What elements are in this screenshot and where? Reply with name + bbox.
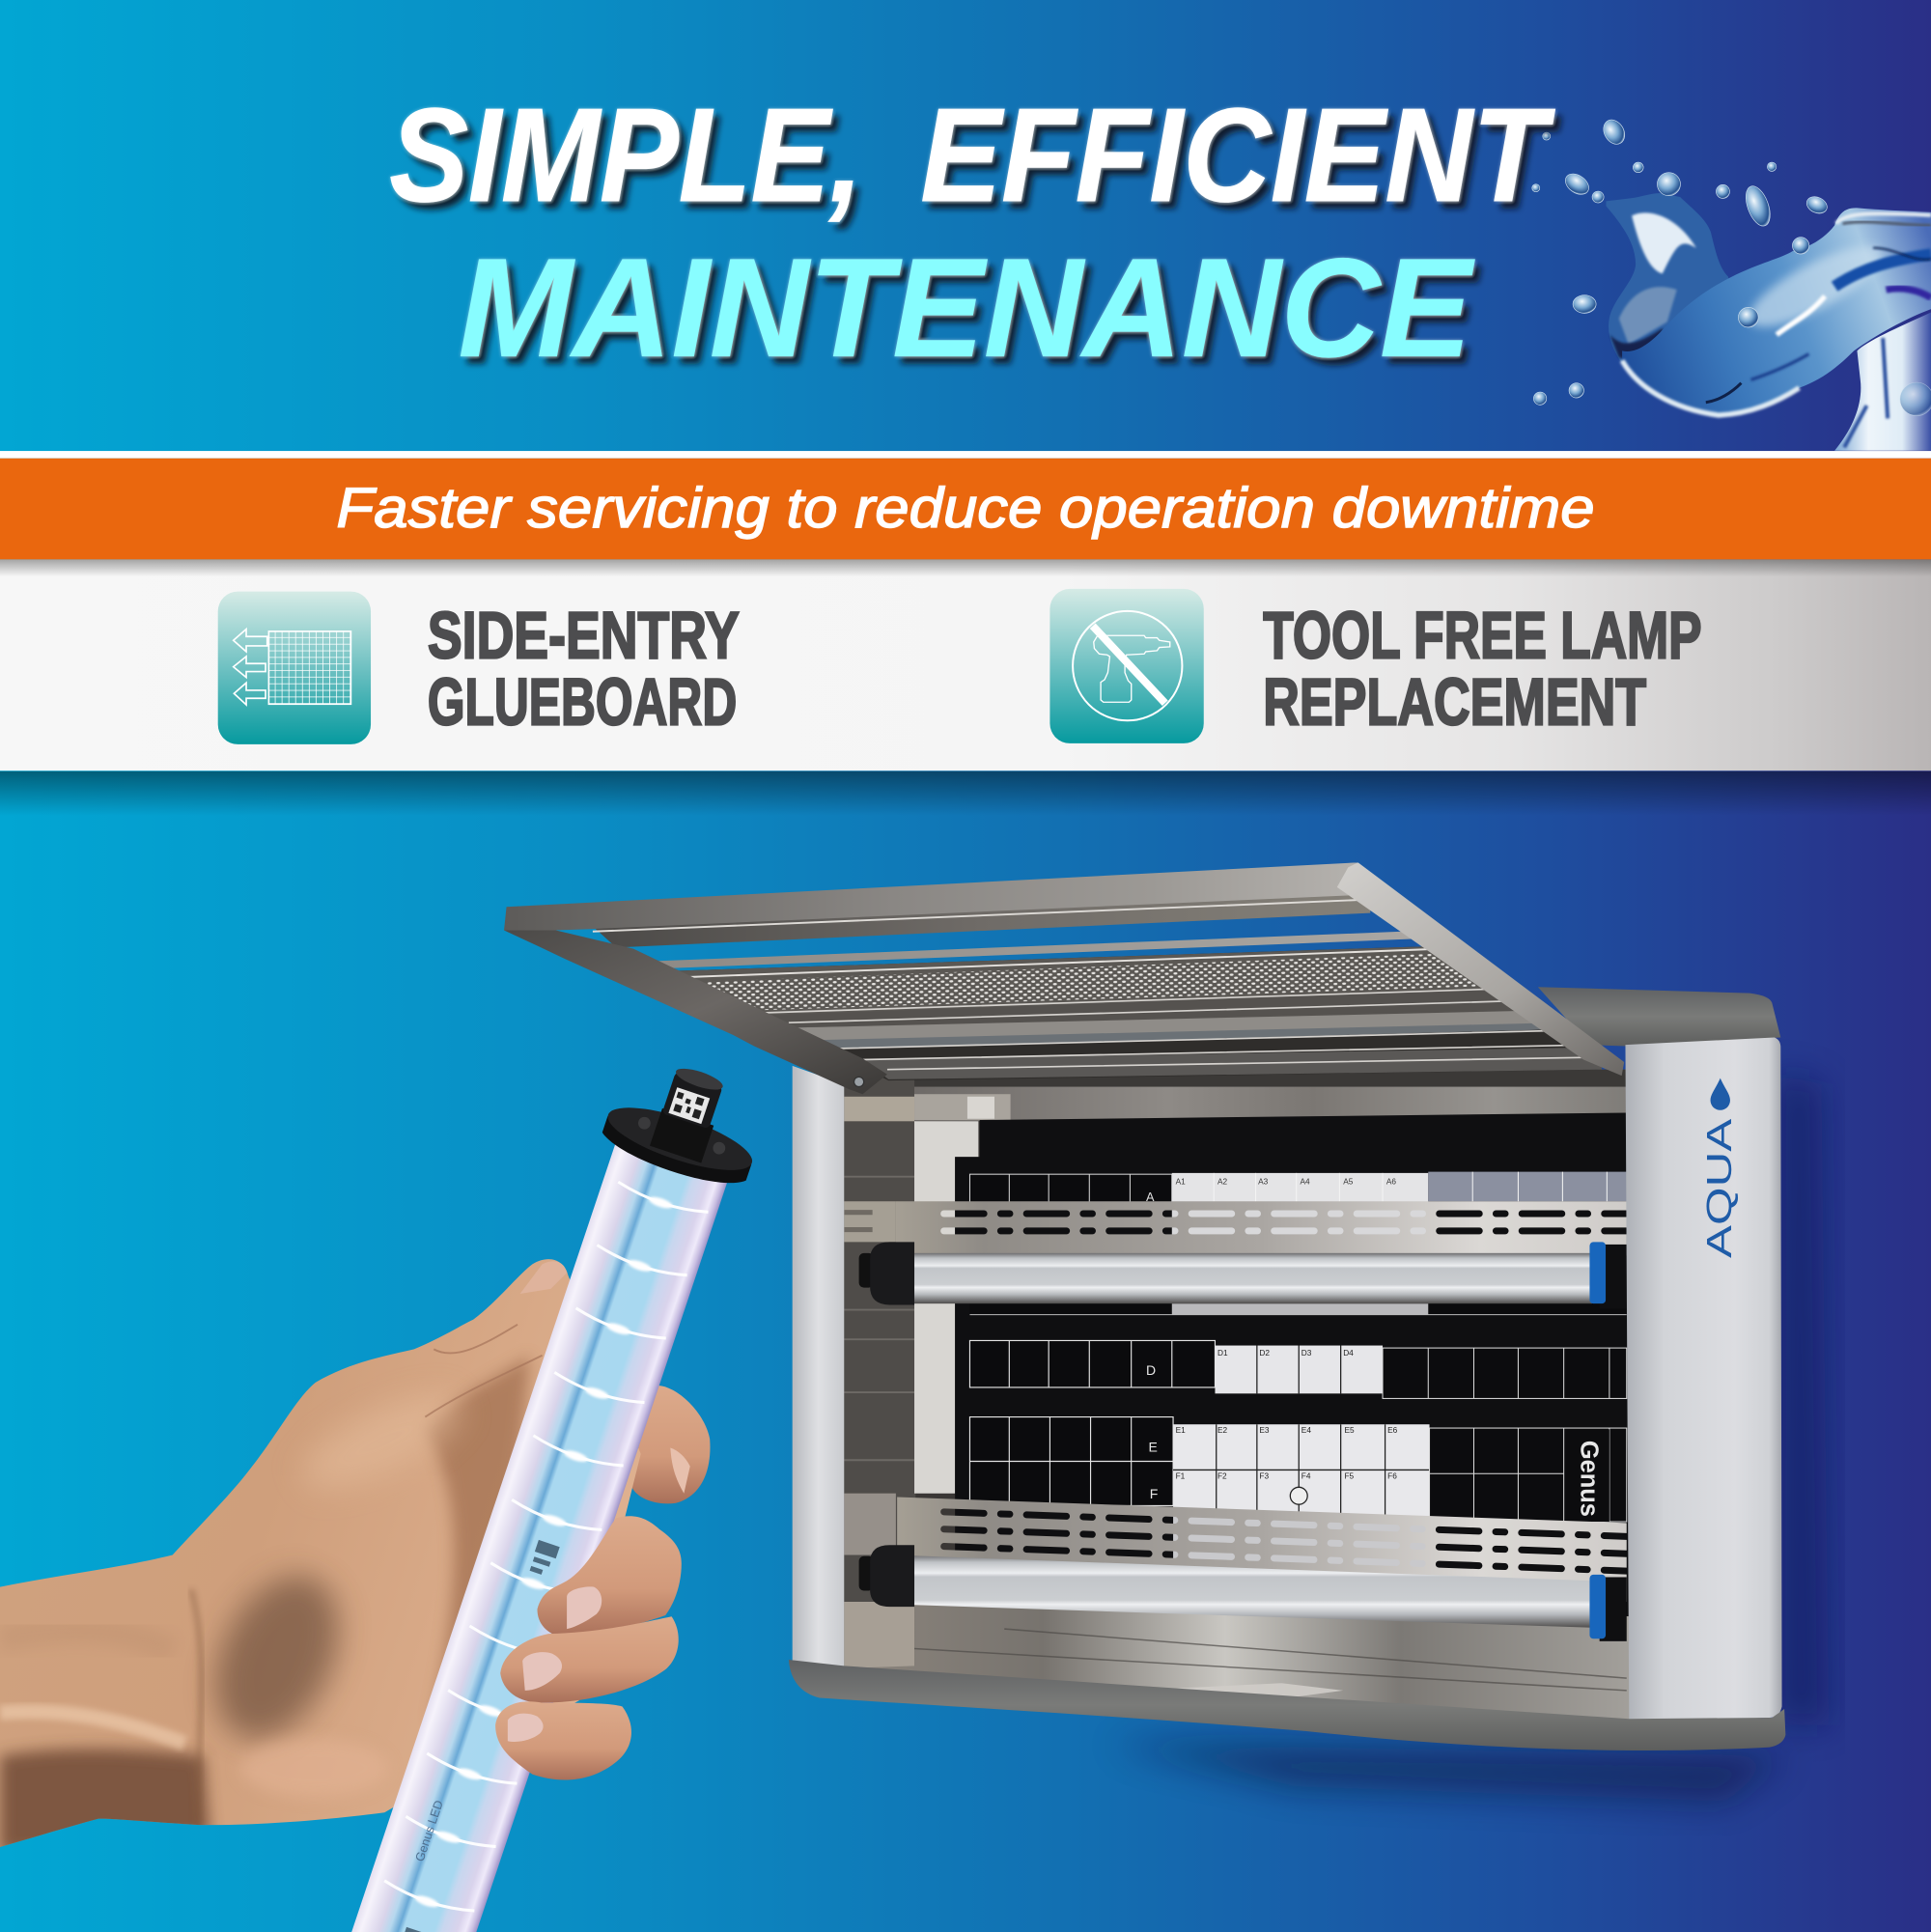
lid lower base bbox=[673, 946, 1602, 1080]
ribbon light centre bbox=[1748, 244, 1885, 332]
glueboard rows E and F: F6 bbox=[1387, 1470, 1397, 1480]
ribbon highlights bbox=[1777, 296, 1825, 335]
heading: tool free lamp replacement: TOOL FREE LAMP bbox=[1263, 598, 1702, 672]
glueboard rows E and F: F2 bbox=[1217, 1470, 1227, 1480]
glueboard row C bbox=[969, 1303, 1627, 1315]
glueboard rows E and F: E1 bbox=[1176, 1425, 1186, 1435]
glueboard rows E and F: E5 bbox=[1344, 1425, 1355, 1435]
glueboard row G behind plate bbox=[1173, 1517, 1430, 1596]
water lower leg bbox=[1834, 312, 1931, 451]
ring fingernail bbox=[522, 1652, 562, 1691]
upper perforated plate bbox=[896, 1201, 1627, 1255]
lid hinge screw bbox=[854, 1077, 864, 1087]
glueboard bbox=[955, 1112, 1639, 1620]
ring finger bbox=[500, 1616, 679, 1703]
logo: AQUA bbox=[1700, 1078, 1739, 1258]
glueboard rows E and F bbox=[969, 1417, 1627, 1522]
left interior wall bbox=[844, 1070, 915, 1673]
heading: tool free lamp replacement: REPLACEMENT bbox=[1263, 664, 1646, 739]
upper lamp bbox=[859, 1242, 1627, 1308]
title line 1: efficient: EFFICIENT bbox=[920, 81, 1555, 230]
top cap bbox=[1538, 987, 1780, 1046]
cabinet interior bbox=[838, 1070, 1639, 1727]
lid top frame bbox=[504, 862, 1368, 930]
title line 1: simple: SIMPLE, bbox=[389, 81, 862, 230]
heading: side-entry glueboard bbox=[428, 598, 740, 739]
little finger bbox=[495, 1701, 631, 1779]
glueboard row A: A4 bbox=[1301, 1176, 1310, 1186]
glueboard row A: A5 bbox=[1343, 1176, 1354, 1186]
title line 2: MAINTENANCE bbox=[459, 229, 1475, 386]
glueboard row D bbox=[969, 1340, 1627, 1398]
icon: side-entry glueboard bbox=[218, 592, 371, 744]
hand shading bbox=[0, 1325, 543, 1855]
glueboard row D: D bbox=[1146, 1362, 1156, 1378]
LED lamp bbox=[327, 1049, 774, 1932]
banner: orange subtitle bbox=[0, 459, 1931, 559]
hand: fingers in front of lamp bbox=[495, 1516, 682, 1779]
glueboard rows E and F: E3 bbox=[1259, 1425, 1270, 1435]
glueboard rows E and F: F bbox=[1150, 1486, 1158, 1501]
crown grey shade bbox=[1619, 287, 1677, 345]
index finger bbox=[630, 1386, 710, 1503]
little fingernail bbox=[508, 1714, 544, 1742]
glueboard row D: D4 bbox=[1343, 1348, 1354, 1358]
panel: features bbox=[0, 559, 1931, 816]
logo: AQUA: AQUA bbox=[1700, 1119, 1739, 1258]
glueboard rows E and F: E6 bbox=[1387, 1425, 1398, 1435]
lamp driver label bbox=[402, 1539, 560, 1932]
white divider band bbox=[0, 451, 1931, 459]
ribbon rim bbox=[1622, 360, 1799, 415]
thumbnail bbox=[520, 1261, 567, 1294]
top steel band bbox=[914, 1070, 1639, 1121]
floor plate bbox=[844, 1602, 1639, 1727]
panel shadow bbox=[0, 771, 1931, 816]
glueboard rows E and F: E bbox=[1149, 1439, 1158, 1454]
illustration: water splash bbox=[1532, 116, 1931, 451]
palm and arm bbox=[0, 1259, 641, 1847]
panel background bbox=[0, 559, 1931, 770]
glueboard rows E and F: F4 bbox=[1301, 1470, 1311, 1480]
lid lower strips bbox=[763, 988, 1602, 1079]
heading: tool free lamp replacement bbox=[1263, 598, 1702, 739]
lamp end cap bbox=[598, 1049, 774, 1194]
lamp brand text: Genus LED bbox=[412, 1799, 446, 1863]
Genus logo: Genus bbox=[1576, 1441, 1603, 1517]
glueboard rows E and F: F3 bbox=[1259, 1470, 1269, 1480]
icon: no tools bbox=[1049, 589, 1204, 743]
glueboard rows E and F: F1 bbox=[1176, 1470, 1186, 1480]
ribbon top edge bbox=[1836, 213, 1931, 224]
right pillar bbox=[1625, 1038, 1782, 1722]
water ribbon bbox=[1622, 208, 1931, 416]
glueboard rows E and F: E4 bbox=[1301, 1425, 1311, 1435]
title bbox=[389, 81, 1555, 386]
glueboard row B behind plate bbox=[1172, 1203, 1428, 1252]
water crown bbox=[1606, 193, 1731, 364]
glueboard rows E and F: E2 bbox=[1217, 1425, 1228, 1435]
middle finger bbox=[537, 1516, 682, 1638]
glueboard row D: D2 bbox=[1259, 1348, 1270, 1358]
hand: palm and index finger behind lamp bbox=[0, 1259, 710, 1855]
product: hinged lid bbox=[504, 862, 1624, 1094]
glueboard row A: A2 bbox=[1217, 1176, 1228, 1186]
water droplets bbox=[1532, 116, 1931, 416]
heading: side-entry glueboard: GLUEBOARD bbox=[428, 664, 737, 739]
crown highlight bbox=[1632, 212, 1696, 273]
LED glow points bbox=[414, 1194, 674, 1910]
glueboard row A: A3 bbox=[1258, 1176, 1269, 1186]
glueboard row A bbox=[969, 1172, 1627, 1204]
glueboard row A: A bbox=[1146, 1190, 1155, 1204]
left pillar bbox=[793, 1066, 844, 1670]
white column bbox=[914, 1121, 978, 1494]
lid strip 2 bbox=[590, 892, 1370, 947]
crown dark base bbox=[1609, 327, 1664, 359]
glueboard row D: D1 bbox=[1217, 1348, 1228, 1358]
lid left rail bbox=[504, 930, 887, 1094]
glueboard row A: A1 bbox=[1176, 1176, 1186, 1186]
lid right rail bbox=[1337, 862, 1624, 1076]
heading: side-entry glueboard: SIDE-ENTRY bbox=[428, 598, 740, 672]
banner: orange subtitle: Faster servicing to reduce operation downtime bbox=[336, 477, 1595, 540]
glueboard row A: A6 bbox=[1386, 1176, 1396, 1186]
lower lamp bbox=[859, 1545, 1627, 1641]
lid strip 3 bbox=[656, 932, 1414, 968]
lid perforated section bbox=[673, 946, 1513, 1018]
bottom tray bbox=[789, 1660, 1785, 1750]
product: UV fly trap cabinet bbox=[789, 987, 1785, 1750]
lamp tube body bbox=[343, 1140, 729, 1932]
LED bars bbox=[382, 1182, 708, 1917]
orange shadow bbox=[0, 559, 1931, 576]
lower perforated plate bbox=[897, 1498, 1627, 1602]
cabinet shadow bbox=[1109, 1072, 1829, 1802]
glueboard row D: D3 bbox=[1301, 1348, 1312, 1358]
middle fingernail bbox=[567, 1586, 602, 1629]
glueboard rows E and F: F5 bbox=[1344, 1470, 1355, 1480]
